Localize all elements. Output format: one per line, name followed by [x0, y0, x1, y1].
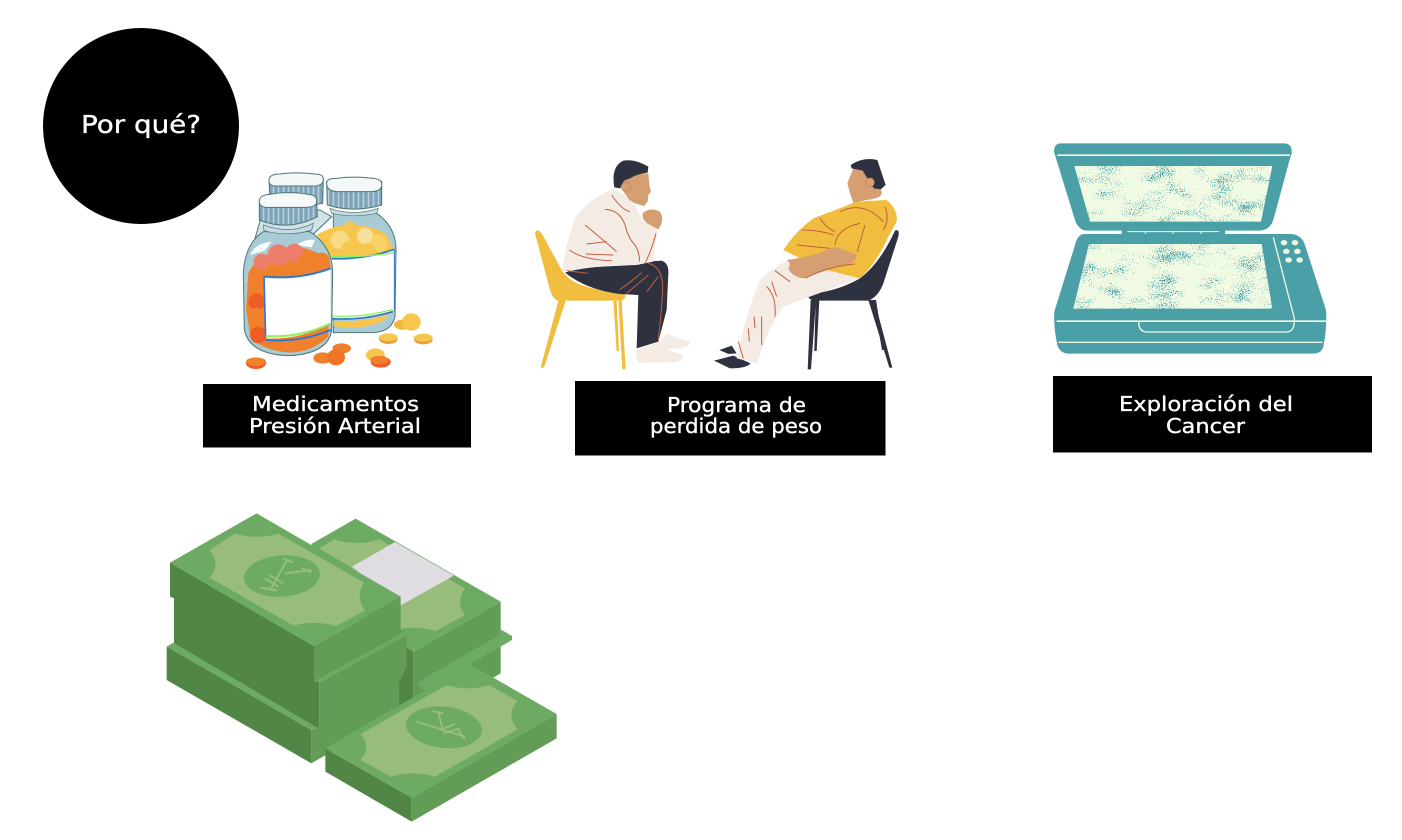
loose pills	[246, 313, 433, 369]
label: Medicamentos Presión Arterial: Presión Arterial	[249, 414, 421, 438]
right man	[714, 159, 897, 368]
scanner lid	[1054, 143, 1292, 231]
scanner hinge	[1122, 230, 1225, 237]
label: Exploración del Cancer	[1053, 376, 1372, 452]
left chair	[535, 230, 625, 368]
label: Programa de perdida de peso: Programa de	[667, 393, 806, 417]
right chair	[808, 230, 899, 369]
label: Exploración del Cancer: Exploración del	[1119, 392, 1293, 416]
heading badge: Por qué?	[43, 28, 239, 224]
left chair rear legs	[613, 301, 626, 369]
rear stack	[311, 519, 512, 723]
left man	[562, 160, 690, 363]
icon: flatbed scanner	[1054, 143, 1326, 354]
front flat bundle	[325, 664, 557, 822]
label: Medicamentos Presión Arterial: Medicamentos	[252, 392, 419, 416]
label: Medicamentos Presión Arterial	[203, 384, 471, 448]
label: Programa de perdida de peso	[575, 381, 886, 456]
orange pill bottle	[243, 193, 333, 356]
scanner base	[1054, 234, 1326, 354]
front main stack	[167, 513, 407, 763]
heading badge: Por qué?: Por qué?	[81, 110, 201, 139]
scanner buttons	[1281, 240, 1303, 263]
icon: stacks of yen banknotes	[167, 513, 557, 822]
back bottle	[255, 173, 332, 247]
label: Exploración del Cancer: Cancer	[1166, 414, 1246, 438]
icon: medicine bottles	[243, 173, 433, 369]
label: Programa de perdida de peso: perdida de peso	[650, 414, 822, 438]
icon: two men in consultation	[535, 159, 899, 369]
yellow pill bottle	[317, 177, 396, 333]
